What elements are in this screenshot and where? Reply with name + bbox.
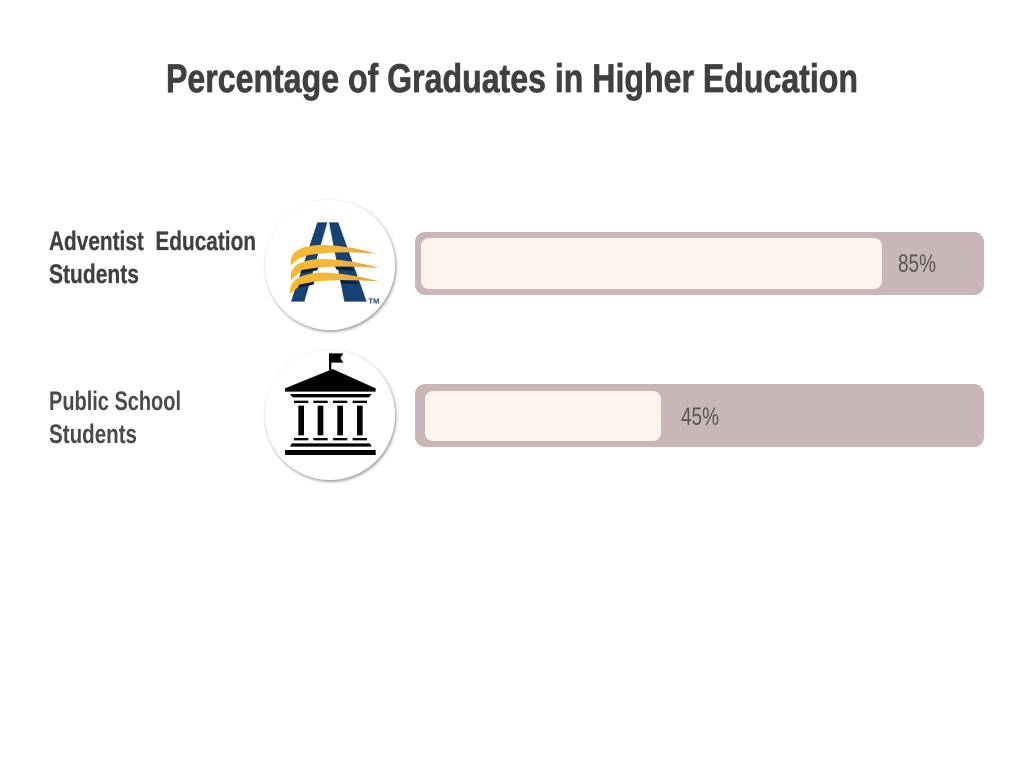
label: Adventist Education Students: Adventist Education [49, 226, 256, 256]
icon: Adventist Education logo [265, 200, 395, 330]
bar track: Public School [415, 384, 984, 447]
bar track: Adventist [415, 232, 984, 295]
label: Public School Students: Public School [49, 386, 181, 416]
bar fill: 45% [425, 391, 661, 441]
icon: school building [265, 350, 395, 480]
icon: Adventist Education logo: TM [368, 298, 380, 305]
title: Percentage of Graduates in Higher Education [166, 57, 858, 101]
row: Adventist Education Students [49, 200, 984, 330]
label: Public School Students: Students [49, 419, 137, 449]
label: Adventist Education Students [49, 226, 256, 289]
bar fill: 85% [421, 238, 882, 289]
value: 45%: 45% [681, 403, 719, 431]
label: Adventist Education Students: Students [49, 259, 139, 289]
label: Public School Students [49, 386, 181, 449]
value: 85%: 85% [898, 250, 936, 278]
row: Public School Students [49, 350, 984, 480]
